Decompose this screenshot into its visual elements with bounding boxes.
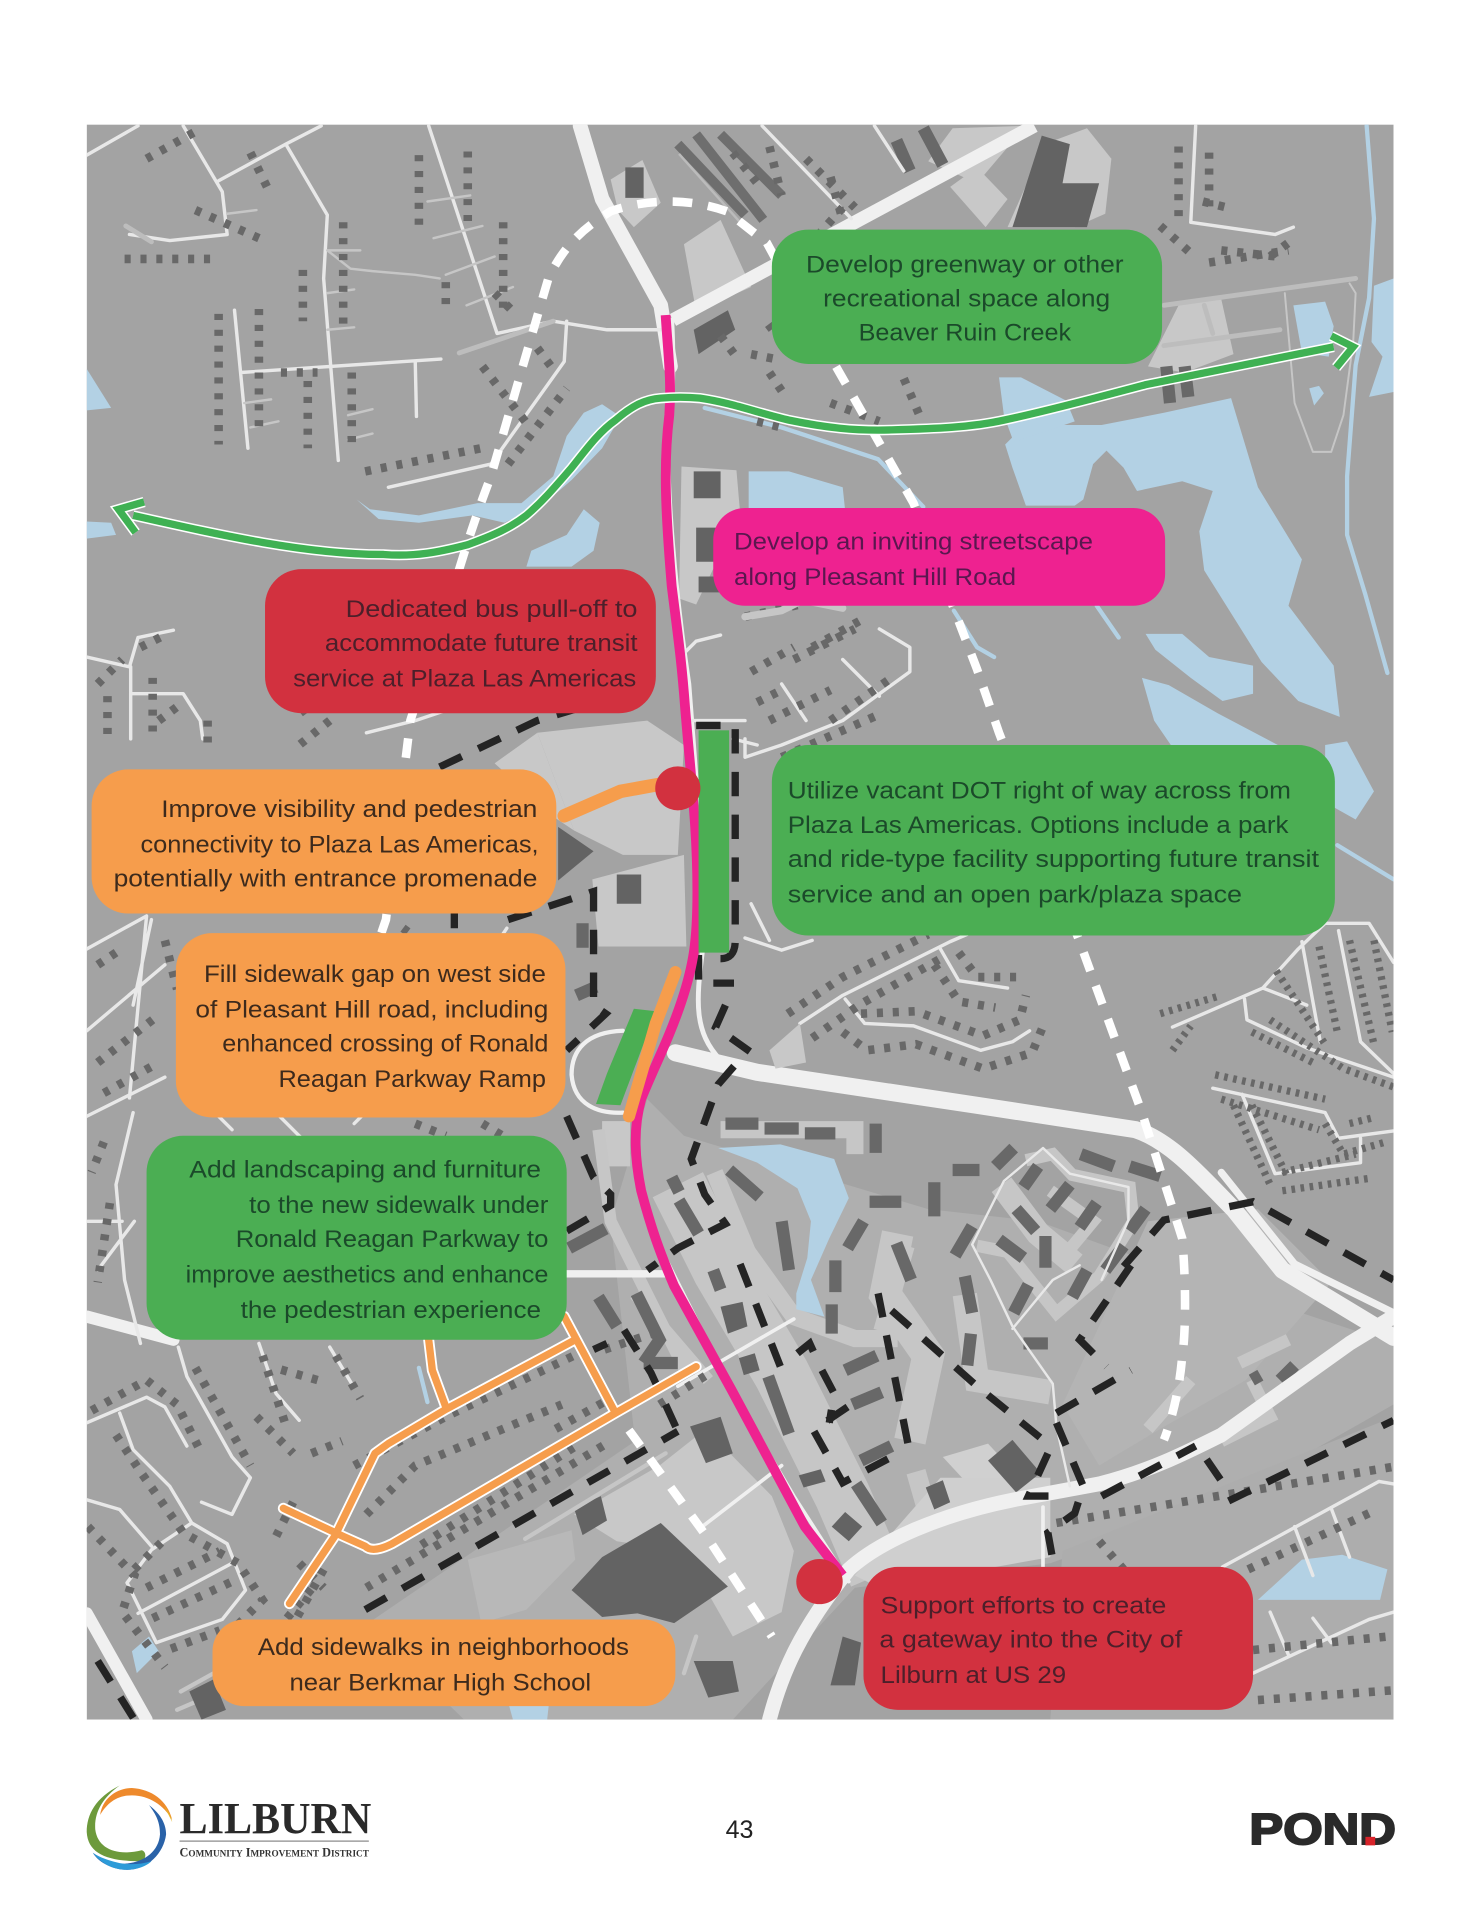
callout: bus pull-off: Dedicated bus pull-off to <box>346 596 638 623</box>
callout: improve visibility: connectivity to Plaza Las Americas, <box>140 831 539 858</box>
callout: gateway: Lilburn at US 29 <box>881 1662 1066 1689</box>
callout: greenway: Beaver Ruin Creek <box>859 320 1072 347</box>
callout: streetscape: along Pleasant Hill Road <box>734 564 1016 591</box>
orange promenade <box>564 784 661 816</box>
callout: vacant DOT right of way: service and an open park/plaza space <box>788 882 1242 909</box>
callout: landscaping: improve aesthetics and enhance <box>186 1261 548 1288</box>
callout: greenway <box>772 230 1162 364</box>
callout: landscaping <box>147 1136 567 1340</box>
road corridor: Pleasant Hill Road streetscape <box>636 315 843 1575</box>
callout: fill sidewalk gap: enhanced crossing of Ronald <box>222 1031 548 1058</box>
callout: bus pull-off <box>265 569 656 713</box>
callout: vacant DOT right of way: Plaza Las Americas. Options include a park <box>788 812 1289 839</box>
callout: vacant DOT right of way: and ride-type facility supporting future transit <box>788 846 1319 873</box>
greenway route with arrows along Beaver Ruin Creek <box>118 336 1353 555</box>
callout: neighborhood sidewalks: near Berkmar High School <box>289 1669 591 1696</box>
callout: greenway: recreational space along <box>823 286 1110 313</box>
callout: fill sidewalk gap: Fill sidewalk gap on west side <box>204 961 546 988</box>
callout: vacant DOT right of way: Utilize vacant DOT right of way across from <box>788 778 1291 805</box>
callout: fill sidewalk gap <box>176 933 565 1117</box>
callout: gateway <box>863 1567 1253 1710</box>
callout: streetscape <box>713 508 1165 606</box>
callout: vacant DOT right of way <box>772 745 1335 936</box>
DOT right of way green block <box>699 730 729 953</box>
callout: streetscape: Develop an inviting streetscape <box>734 529 1093 556</box>
red node: Plaza Las Americas <box>655 766 700 810</box>
map base layer: streets, buildings, water <box>87 125 1394 1720</box>
green landscaping strip <box>596 1009 656 1105</box>
callout: landscaping: Add landscaping and furniture <box>189 1156 541 1183</box>
callout: gateway: Support efforts to create <box>881 1592 1166 1619</box>
logo: Lilburn wordmark: LILBURN <box>180 1794 372 1843</box>
logo: Lilburn CID swirl <box>87 1786 172 1870</box>
callout: landscaping: Ronald Reagan Parkway to <box>236 1226 548 1253</box>
callout: improve visibility <box>92 769 556 914</box>
callout: landscaping: the pedestrian experience <box>241 1297 541 1324</box>
callout: improve visibility: potentially with entrance promenade <box>114 866 537 893</box>
logo: POND: POND <box>1249 1805 1396 1854</box>
logo: Lilburn wordmark: COMMUNITY IMPROVEMENT DISTRICT <box>180 1845 369 1859</box>
callout: landscaping: to the new sidewalk under <box>249 1192 548 1219</box>
southeast neighborhoods <box>1223 1481 1394 1673</box>
callout: gateway: a gateway into the City of <box>879 1627 1182 1654</box>
orange sidewalk gap strip <box>629 972 675 1116</box>
red node: US 29 gateway <box>796 1559 843 1604</box>
callout: neighborhood sidewalks <box>213 1619 675 1706</box>
callout: fill sidewalk gap: of Pleasant Hill road, including <box>195 996 548 1023</box>
page number: 43 <box>726 1816 753 1844</box>
south-central pads <box>678 1185 877 1575</box>
callout: bus pull-off: accommodate future transit <box>325 630 638 657</box>
callout: greenway: Develop greenway or other <box>806 251 1124 278</box>
callout: fill sidewalk gap: Reagan Parkway Ramp <box>278 1066 546 1093</box>
orange neighborhood sidewalks <box>283 1317 696 1604</box>
callout: improve visibility: Improve visibility and pedestrian <box>161 796 537 823</box>
callout: bus pull-off: service at Plaza Las Americas <box>293 665 636 692</box>
callout: neighborhood sidewalks: Add sidewalks in neighborhoods <box>258 1634 629 1661</box>
